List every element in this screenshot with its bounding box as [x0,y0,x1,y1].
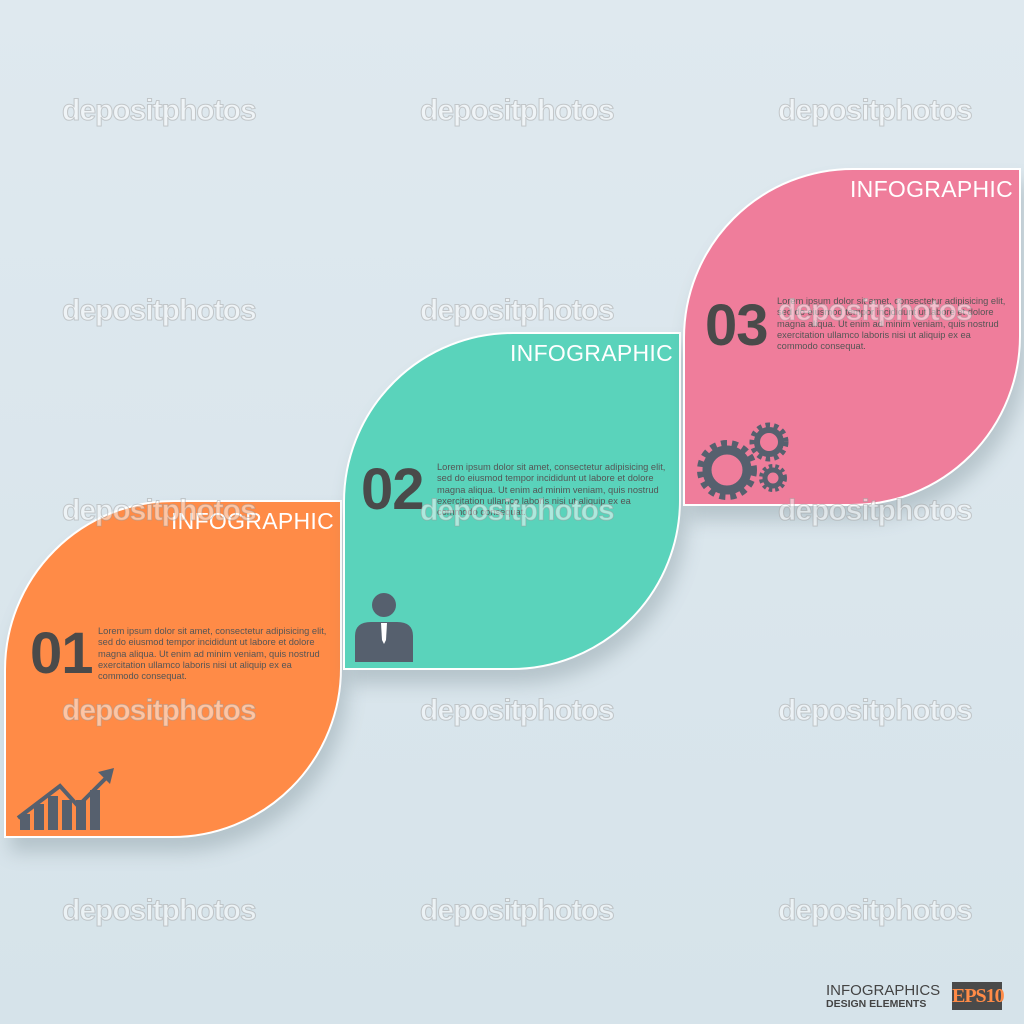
text 03: Lorem ipsum dolor sit amet, consectetur adipisicing elit, sed do eiusmod tempor incididunt ut labore et dolore magna aliqua. Ut enim ad minim veniam, quis nostrud exercitation ullamco laboris nisi ut aliquip ex ea commodo consequat. [777,296,1005,351]
footer logo: INFOGRAPHICS [826,982,940,999]
watermarks: depositphotos [778,494,972,527]
heading 02: INFOGRAPHIC [510,340,673,366]
icon: person [355,593,413,662]
number 02: 02 [361,457,424,522]
watermarks: depositphotos [420,894,614,927]
panel: 03 pink [683,168,1021,506]
footer logo: EPS10 [952,985,1004,1007]
heading 03: INFOGRAPHIC [850,176,1013,202]
icon: gears [697,422,788,500]
watermarks: depositphotos [62,694,256,727]
watermarks: depositphotos [420,494,614,527]
watermarks: depositphotos [420,294,614,327]
number 01: 01 [30,621,93,686]
watermarks: depositphotos [420,94,614,127]
watermarks: depositphotos [62,494,256,527]
watermarks: depositphotos [420,694,614,727]
watermarks: depositphotos [778,94,972,127]
panel: 02 teal [343,332,681,670]
watermarks: depositphotos [62,94,256,127]
text 02: Lorem ipsum dolor sit amet, consectetur adipisicing elit, sed do eiusmod tempor incididunt ut labore et dolore magna aliqua. Ut enim ad minim veniam, quis nostrud exercitation ullamco laboris nisi ut aliquip ex ea commodo consequat. [437,462,665,517]
panel: 01 orange [4,500,342,838]
heading 01: INFOGRAPHIC [171,508,334,534]
footer logo: DESIGN ELEMENTS [826,998,926,1010]
watermarks: depositphotos [778,894,972,927]
watermarks: depositphotos [778,294,972,327]
footer logo [826,982,1004,1010]
watermarks: depositphotos [62,894,256,927]
watermarks: depositphotos [62,294,256,327]
text 01: Lorem ipsum dolor sit amet, consectetur adipisicing elit, sed do eiusmod tempor incididunt ut labore et dolore magna aliqua. Ut enim ad minim veniam, quis nostrud exercitation ullamco laboris nisi ut aliquip ex ea commodo consequat. [98,626,326,681]
icon: chart [16,768,114,830]
number 03: 03 [705,293,768,358]
watermarks: depositphotos [778,694,972,727]
